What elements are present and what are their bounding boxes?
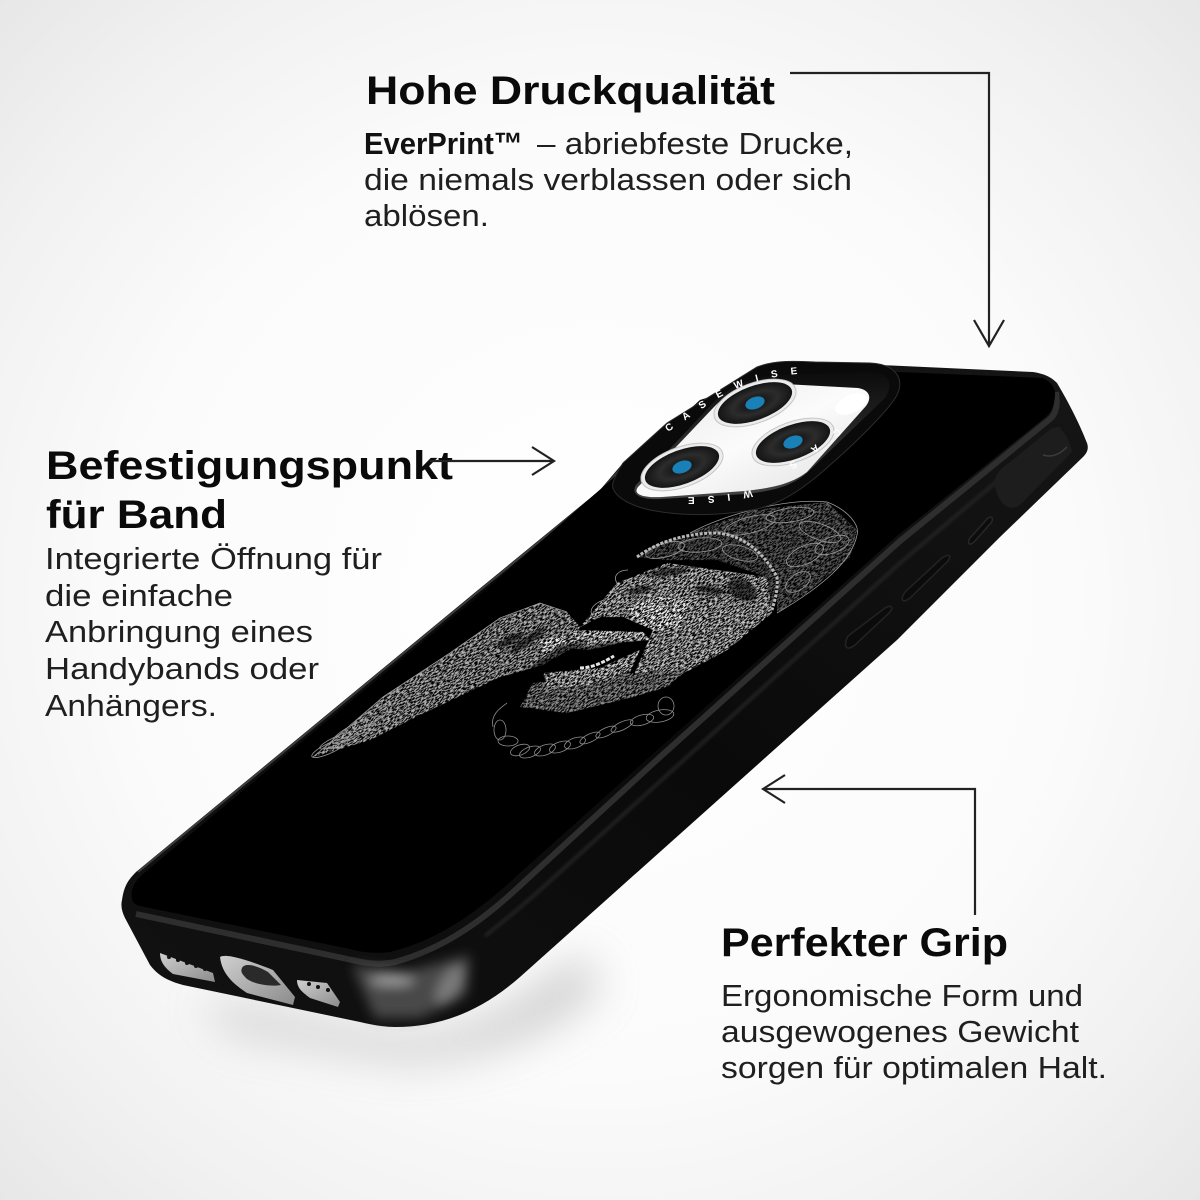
description: sorgen für optimalen Halt. — [721, 1050, 1107, 1085]
lens top — [708, 369, 802, 437]
heading — [46, 444, 453, 537]
description: ausgewogenes Gewicht — [721, 1014, 1079, 1049]
casewise lettering — [666, 367, 840, 504]
casewise lettering: CASEWISE — [666, 367, 798, 431]
side groove — [485, 428, 1060, 936]
description: Handybands oder — [45, 651, 319, 686]
cap band — [637, 533, 777, 610]
teeth — [580, 656, 614, 668]
heading: Perfekter Grip — [721, 921, 1008, 965]
charging port — [220, 956, 295, 1005]
phone shadow — [200, 955, 600, 1060]
necklace — [492, 697, 675, 760]
island frame — [613, 361, 900, 515]
case left edge highlight — [138, 467, 622, 872]
case body — [121, 361, 1088, 1027]
rim highlight — [136, 392, 1057, 964]
heading: für Band — [46, 493, 227, 537]
face shadows — [496, 566, 761, 735]
description: – abriebfeste Drucke, — [537, 126, 853, 161]
description: Integrierte Öffnung für — [45, 541, 382, 576]
right speaker — [297, 980, 340, 1007]
callout: Hohe Druckqualität — [364, 69, 853, 233]
side switch — [969, 517, 992, 544]
flash — [832, 389, 870, 419]
arrow: grip callout to phone side — [763, 775, 975, 915]
description: ablösen. — [364, 198, 489, 233]
description: Anhängers. — [45, 688, 217, 723]
grip pocket — [995, 427, 1072, 508]
heading: Hohe Druckqualität — [366, 69, 775, 113]
white camera plate — [637, 383, 869, 497]
outline scribbles — [310, 501, 857, 761]
callout: Perfekter Grip — [721, 921, 1107, 1085]
arrow: top callout to phone — [790, 73, 1004, 346]
left speaker — [160, 953, 215, 982]
callout: Befestigungspunkt für Band — [45, 444, 453, 723]
description: EverPrint™ — [364, 126, 523, 161]
description: die einfache — [45, 578, 233, 613]
description — [45, 541, 382, 723]
lens right — [746, 408, 840, 476]
casewise lettering: WISE — [688, 490, 754, 504]
inner lip — [634, 372, 890, 499]
camera island — [612, 360, 900, 516]
description: die niemals verblassen oder sich — [364, 162, 852, 197]
lens left — [635, 433, 729, 501]
bottom ports — [160, 953, 340, 1007]
phone case — [121, 361, 1088, 1027]
back face — [132, 368, 1055, 953]
portrait illustration — [189, 238, 981, 1021]
heading: Befestigungspunkt — [46, 444, 453, 488]
description — [364, 126, 853, 233]
bottom corner sheen — [352, 955, 470, 1018]
description — [721, 978, 1107, 1085]
arrow: band callout to camera — [430, 447, 554, 475]
volume buttons — [846, 555, 950, 648]
scribble texture — [189, 238, 981, 1021]
description: Anbringung eines — [45, 614, 313, 649]
description: Ergonomische Form und — [721, 978, 1083, 1013]
speaker holes — [167, 955, 330, 992]
